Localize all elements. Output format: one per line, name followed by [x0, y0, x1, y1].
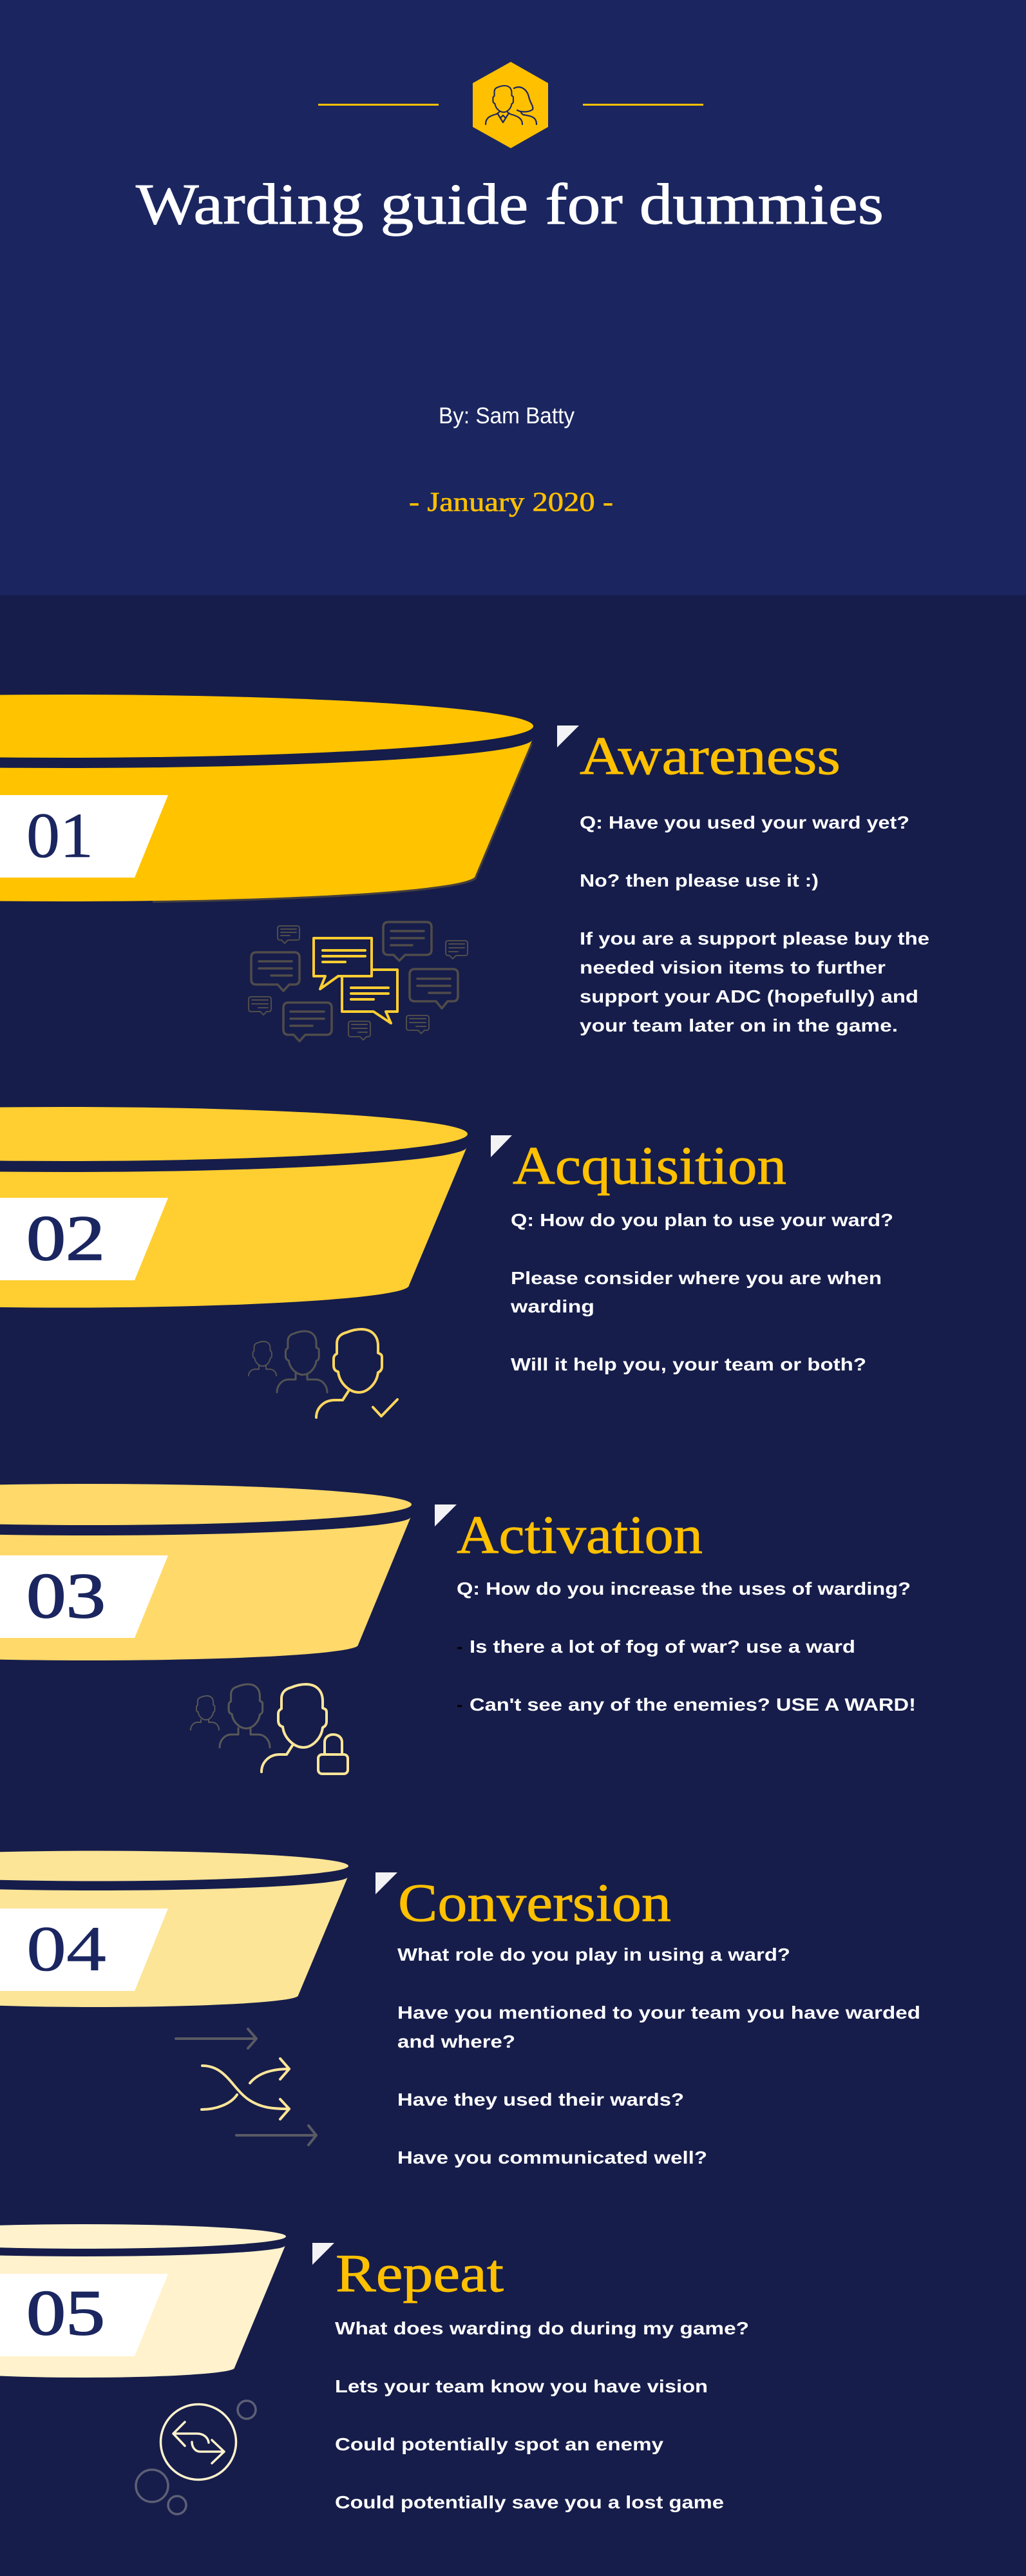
- heading: Awareness: Awareness: [580, 726, 841, 786]
- number: 02: [26, 1202, 105, 1274]
- funnel rim: [0, 695, 533, 758]
- number: 05: [26, 2277, 105, 2349]
- corner triangle: [375, 1872, 397, 1894]
- funnel body: [0, 1517, 411, 1660]
- number: 04: [26, 1913, 106, 1985]
- icon: people with lock: [191, 1684, 348, 1774]
- body text: [335, 2318, 749, 2512]
- corner triangle: [312, 2243, 334, 2265]
- header left rule: [318, 104, 439, 106]
- body text: [580, 812, 929, 1035]
- body text: -: [457, 1637, 462, 1657]
- highlighted yellow bubbles: [314, 938, 397, 1023]
- body text: Could potentially save you a lost game: [335, 2492, 724, 2512]
- body text: your team later on in the game.: [580, 1015, 898, 1035]
- icon: hexagon with people: [473, 62, 548, 148]
- panel: step 02 text: [491, 1135, 893, 1374]
- icon: repeat circle: [136, 2401, 256, 2514]
- large grey bubbles: [251, 922, 458, 1041]
- body text: Will it help you, your team or both?: [511, 1354, 866, 1374]
- heading: Conversion: Conversion: [398, 1873, 671, 1933]
- title: Warding guide for dummies: [136, 173, 884, 236]
- funnel rim: [0, 1484, 412, 1525]
- heading: Acquisition: Acquisition: [513, 1136, 786, 1196]
- body text: [397, 1945, 920, 2167]
- body text: Have they used their wards?: [397, 2090, 684, 2110]
- body text: [457, 1579, 916, 1715]
- number: 01: [26, 800, 93, 871]
- funnel body: [0, 739, 533, 901]
- body text: What role do you play in using a ward?: [397, 1945, 790, 1965]
- highlighted person: [316, 1329, 397, 1418]
- body text: and where?: [397, 2032, 515, 2052]
- funnel body: [0, 1147, 467, 1308]
- body text: support your ADC (hopefully) and: [580, 986, 918, 1006]
- header right rule: [583, 104, 703, 106]
- panel: step 03 funnel: [0, 1484, 412, 1660]
- funnel body: [0, 1877, 348, 2007]
- panel: step 04 text: [375, 1872, 920, 2167]
- body text: Is there a lot of fog of war? use a ward: [470, 1637, 855, 1657]
- number tag: [0, 1908, 168, 1991]
- panel: step 01 text: [557, 726, 929, 1035]
- body text: Could potentially spot an enemy: [335, 2434, 664, 2454]
- small circles: [136, 2401, 256, 2514]
- number tag: [0, 795, 168, 878]
- icon: crossing arrows: [176, 2029, 316, 2145]
- number tag: [0, 1198, 168, 1280]
- body text: Can't see any of the enemies? USE A WARD!: [470, 1695, 916, 1715]
- grey arrow top: [176, 2029, 256, 2048]
- body text: If you are a support please buy the: [580, 928, 929, 948]
- body text: Lets your team know you have vision: [335, 2376, 708, 2396]
- body text: -: [457, 1695, 462, 1715]
- panel: step 05 text: [312, 2243, 749, 2512]
- funnel rim: [0, 2224, 286, 2249]
- repeat arrows: [173, 2422, 224, 2463]
- corner triangle: [435, 1504, 457, 1526]
- body text: Q: How do you increase the uses of warding?: [457, 1579, 911, 1599]
- panel: step 05 funnel: [0, 2224, 286, 2378]
- panel: step 02 funnel: [0, 1107, 468, 1308]
- yellow crossing arrows: [202, 2059, 289, 2119]
- small grey person: [191, 1696, 219, 1730]
- body text: No? then please use it :): [580, 870, 819, 890]
- number tag: [0, 2274, 168, 2356]
- panel: step 03 text: [435, 1504, 916, 1715]
- number: 03: [26, 1560, 106, 1631]
- check mark: [373, 1399, 397, 1416]
- funnel rim: [0, 1107, 468, 1161]
- medium grey person: [220, 1684, 270, 1747]
- body text: Q: Have you used your ward yet?: [580, 812, 909, 832]
- body text: warding: [510, 1296, 594, 1316]
- number tag: [0, 1555, 168, 1638]
- body text: Have you mentioned to your team you have warded: [397, 2003, 920, 2023]
- body text: [510, 1210, 893, 1374]
- corner triangle: [557, 726, 579, 747]
- icon: chat bubbles: [249, 922, 468, 1041]
- body text: Have you communicated well?: [397, 2148, 707, 2167]
- small grey person: [249, 1341, 276, 1376]
- icon: people with check: [249, 1329, 397, 1418]
- heading: Repeat: Repeat: [336, 2244, 504, 2303]
- author: By: Sam Batty: [439, 403, 575, 428]
- small grey bubbles: [249, 926, 468, 1040]
- date: - January 2020 -: [409, 488, 613, 517]
- funnel shadow: [153, 741, 534, 903]
- body text: Q: How do you plan to use your ward?: [511, 1210, 893, 1230]
- panel: step 01 funnel: [0, 695, 534, 903]
- body text: Please consider where you are when: [511, 1268, 882, 1288]
- funnel rim: [0, 1850, 348, 1881]
- grey arrow bottom: [236, 2126, 316, 2145]
- body text: needed vision items to further: [580, 957, 886, 977]
- corner triangle: [491, 1135, 512, 1157]
- highlighted person: [261, 1684, 348, 1774]
- main circle: [161, 2405, 236, 2479]
- padlock: [318, 1754, 348, 1774]
- heading: Activation: Activation: [457, 1505, 703, 1565]
- funnel body: [0, 2245, 285, 2378]
- body text: What does warding do during my game?: [335, 2318, 749, 2338]
- header panel: [0, 0, 1026, 595]
- medium grey person: [277, 1331, 327, 1392]
- panel: step 04 funnel: [0, 1850, 348, 2007]
